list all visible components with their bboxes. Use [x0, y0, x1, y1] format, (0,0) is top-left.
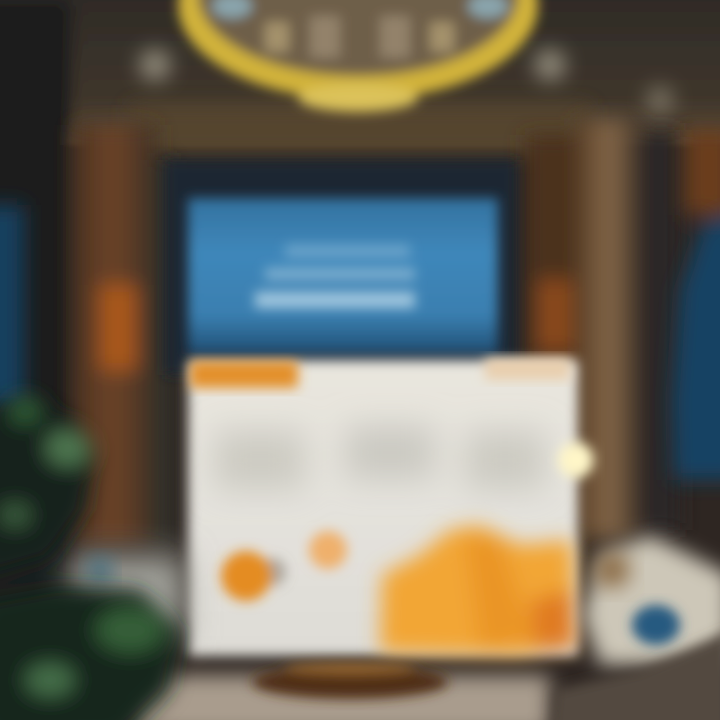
- board heading tab: [190, 361, 298, 388]
- board orange circle small: [309, 531, 347, 569]
- panel: white board: [188, 358, 578, 656]
- star glow: [558, 442, 594, 478]
- panel: left blue window: [0, 205, 24, 405]
- panel: left wood column: [72, 125, 172, 550]
- board text columns: [215, 425, 545, 490]
- panel: right blue drape: [672, 130, 720, 480]
- chandelier: [178, 0, 538, 112]
- panel: ceiling beam: [130, 105, 590, 155]
- panel: right wood column: [525, 120, 680, 540]
- panel: left plants: [0, 395, 185, 720]
- ceiling lights: [139, 49, 674, 114]
- board heading tab right: [485, 358, 570, 380]
- panel: floor: [130, 675, 550, 720]
- panel: central window: [165, 160, 517, 375]
- panel: table: [252, 662, 448, 699]
- board orange circle large: [221, 551, 286, 601]
- window glow text blocks: [255, 245, 415, 308]
- panel: sofa right: [550, 535, 720, 720]
- board orange area: [380, 525, 576, 655]
